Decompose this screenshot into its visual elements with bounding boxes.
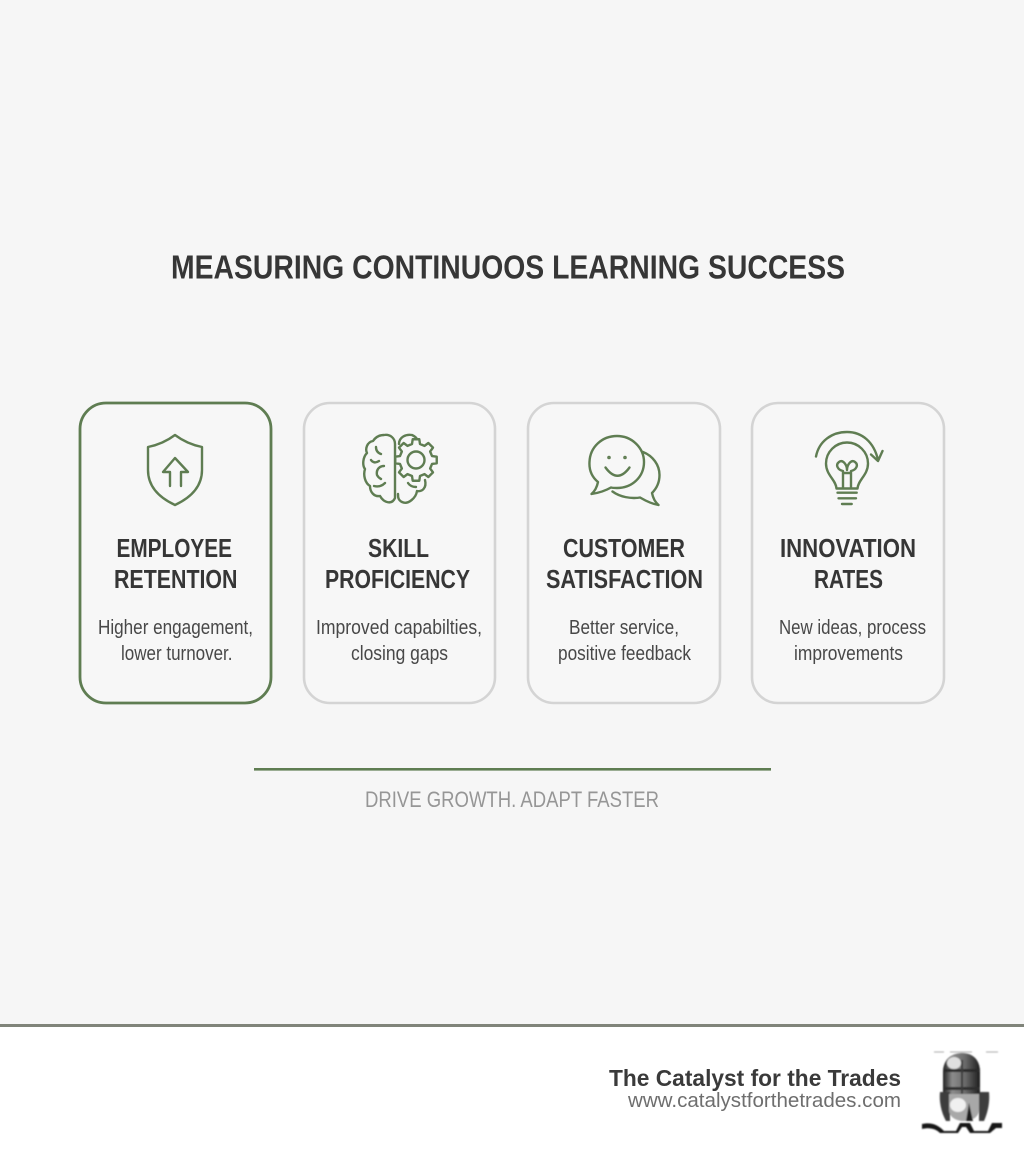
card frame — [528, 403, 720, 703]
card frame — [80, 403, 271, 703]
heading — [546, 535, 703, 594]
description: New ideas, process — [779, 617, 926, 639]
description — [316, 617, 482, 665]
description: Better service, — [569, 617, 679, 639]
footer url: www.catalystforthetrades.com — [627, 1090, 901, 1112]
description — [98, 617, 253, 665]
panel: customer satisfaction — [528, 403, 720, 703]
panel: skill proficiency — [304, 403, 495, 703]
heading: SKILL — [368, 535, 429, 563]
description: positive feedback — [558, 643, 692, 665]
heading — [780, 535, 916, 594]
icon: shield with up arrow — [148, 435, 202, 505]
tagline: DRIVE GROWTH. ADAPT FASTER — [365, 787, 659, 812]
description — [779, 617, 926, 665]
icon: microphone logo — [922, 1052, 1002, 1133]
description — [558, 617, 692, 665]
icon: light bulb with arrow — [816, 432, 882, 504]
panel: innovation rates — [752, 403, 944, 703]
heading: INNOVATION — [780, 535, 916, 563]
icon: brain and gear — [363, 435, 437, 503]
description: Improved capabilties, — [316, 617, 482, 639]
heading: SATISFACTION — [546, 566, 703, 594]
description: Higher engagement, — [98, 617, 253, 639]
heading: RETENTION — [114, 566, 238, 594]
heading: CUSTOMER — [563, 535, 685, 563]
heading: PROFICIENCY — [325, 566, 470, 594]
heading — [114, 535, 238, 594]
heading: EMPLOYEE — [116, 535, 232, 563]
heading: RATES — [814, 566, 883, 594]
description: lower turnover. — [121, 643, 232, 665]
heading — [325, 535, 470, 594]
accent rule — [254, 768, 771, 771]
card frame — [304, 403, 495, 703]
title: MEASURING CONTINUOOS LEARNING SUCCESS — [171, 248, 845, 286]
card frame — [752, 403, 944, 703]
description: closing gaps — [351, 643, 448, 665]
footer band — [0, 1024, 1024, 1154]
panel: employee retention — [80, 403, 271, 703]
footer brand name: The Catalyst for the Trades — [609, 1065, 901, 1091]
description: improvements — [794, 643, 903, 665]
icon: smiling chat bubbles — [589, 436, 660, 505]
